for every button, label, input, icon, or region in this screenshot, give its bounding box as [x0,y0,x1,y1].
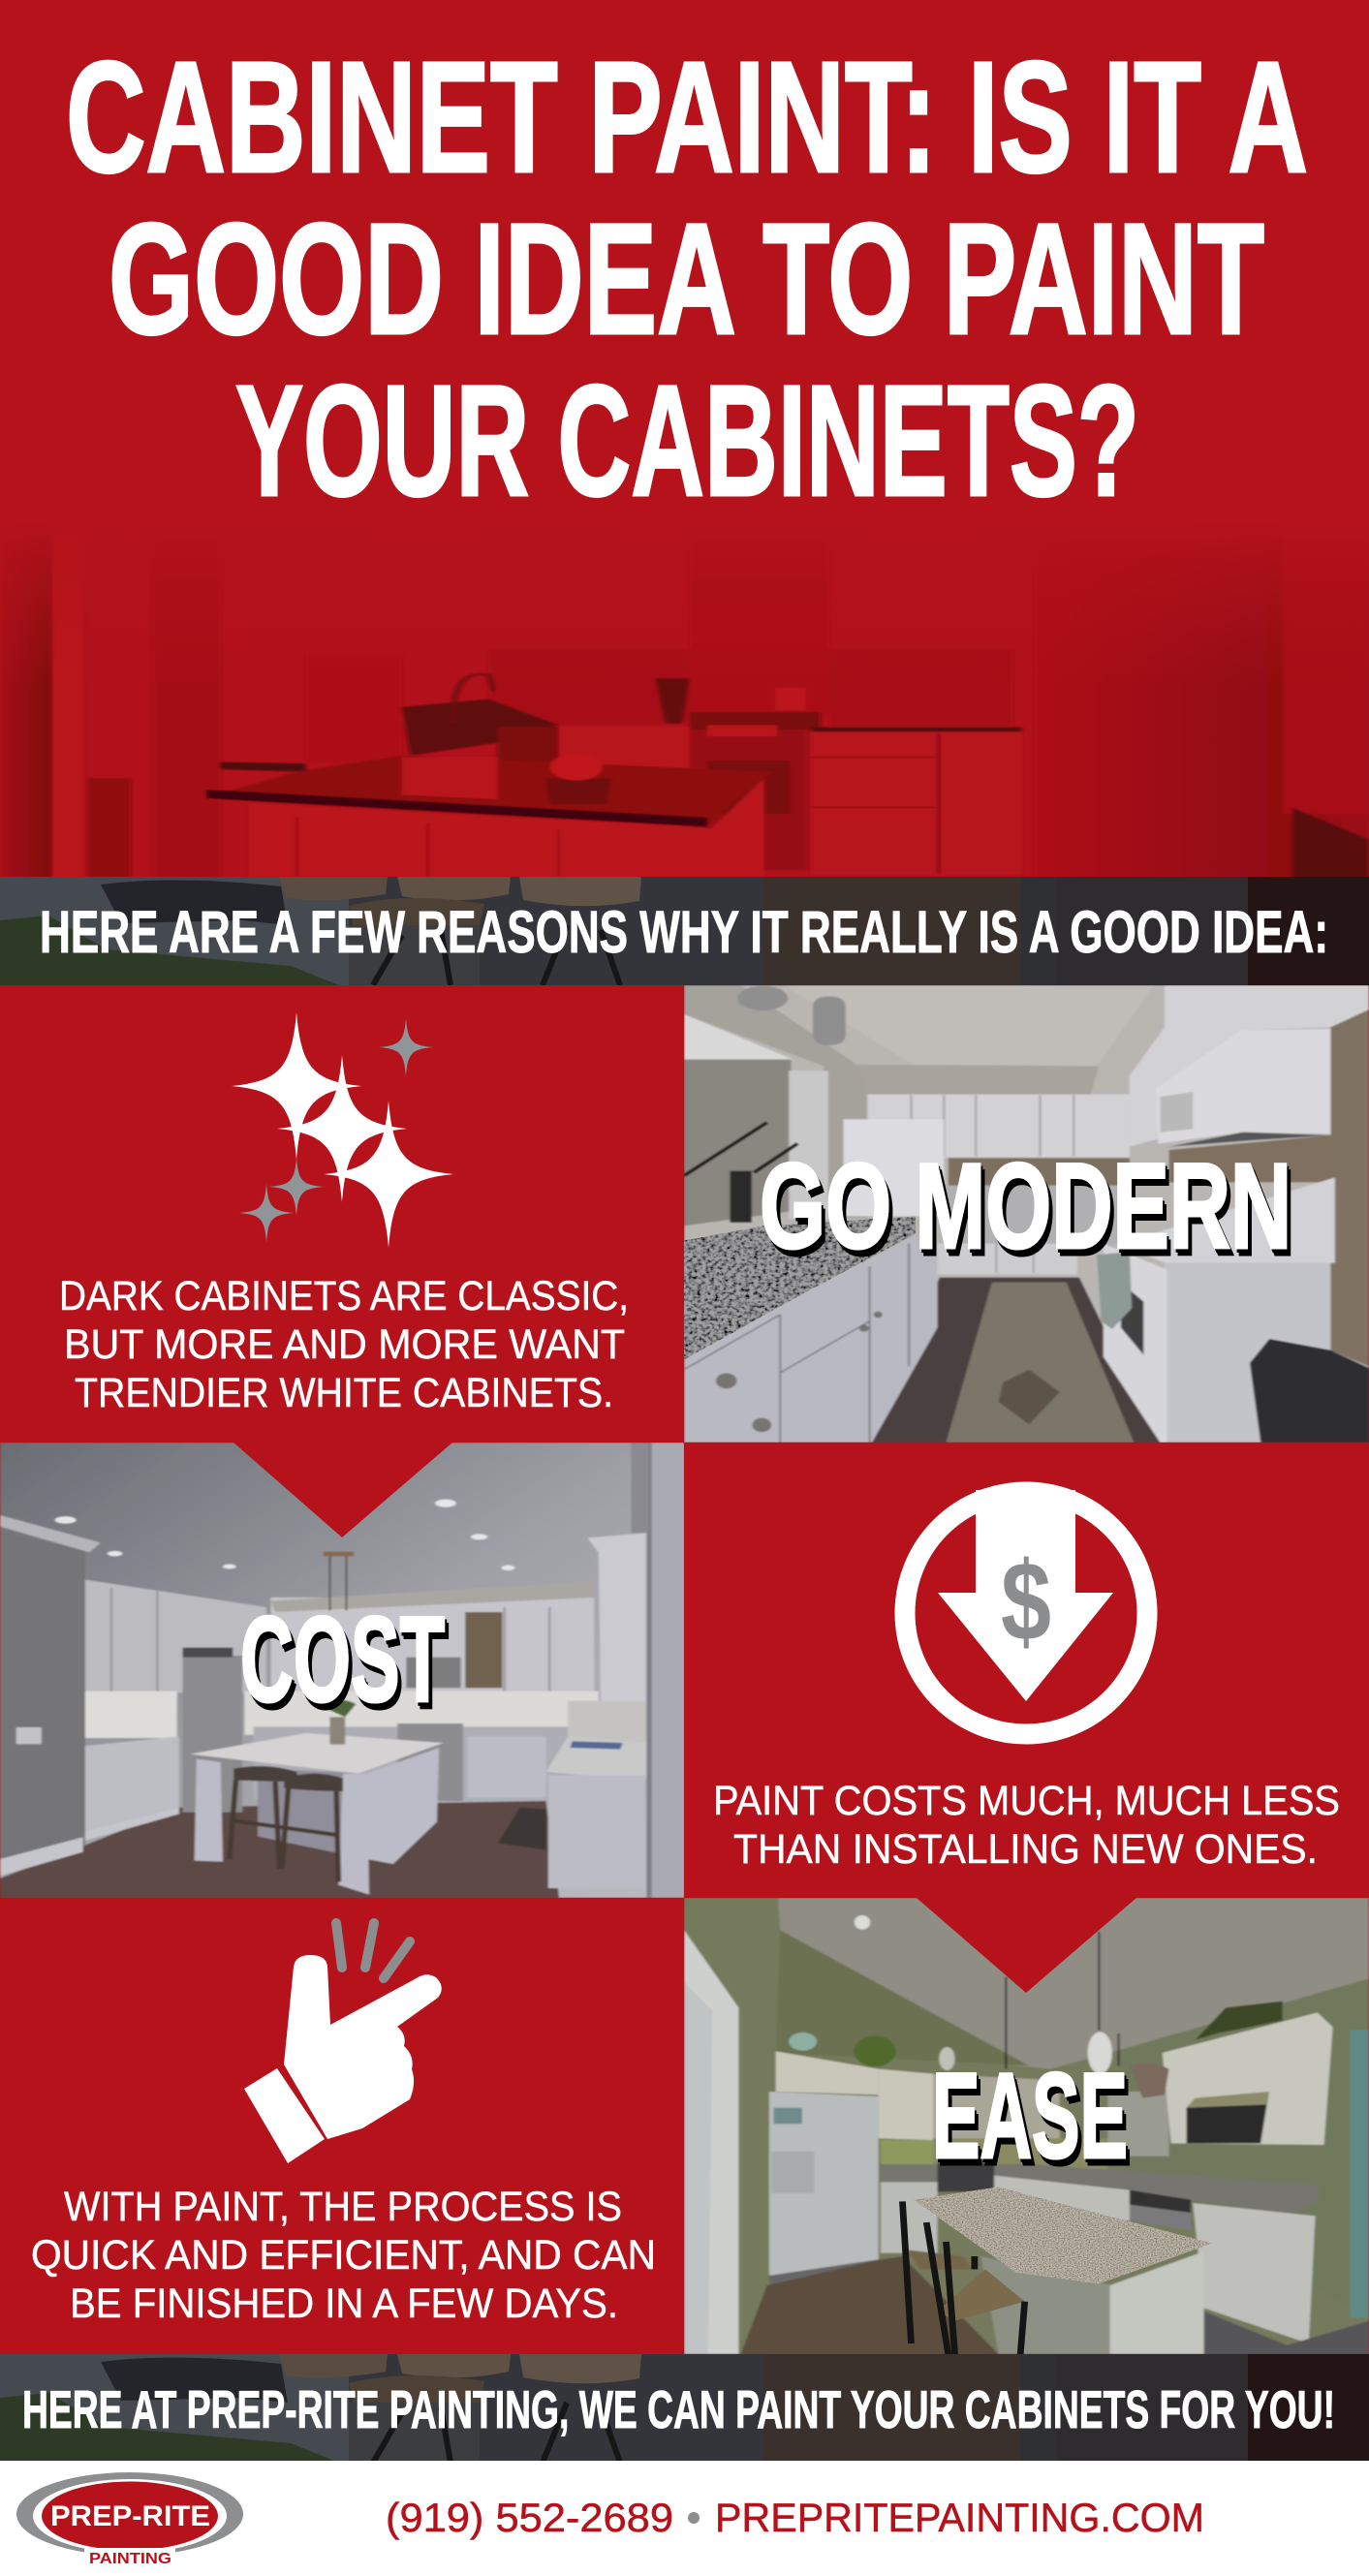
text: cost body [713,1778,1340,1873]
panel: cost text [684,1443,1369,1898]
logo: Prep-Rite Painting: PREP-RITE [50,2500,210,2532]
photo: go modern kitchen [684,985,1369,1443]
icon: dollar down arrow [905,1490,1147,1734]
text: go modern body: TRENDIER WHITE CABINETS. [75,1370,613,1416]
logo: Prep-Rite Painting: PAINTING [89,2551,171,2567]
photo: cost kitchen [0,1443,684,1898]
icon: dollar down arrow: $ [1001,1538,1051,1664]
banner: call to action [0,2354,1369,2463]
text: ease body: BE FINISHED IN A FEW DAYS. [70,2281,618,2327]
text: go modern body: DARK CABINETS ARE CLASSIC, [59,1273,629,1319]
icon: finger snap hand [244,1923,442,2163]
heading: cost: COST [240,1593,445,1727]
photo: ease kitchen [684,1898,1369,2354]
text: ease body: QUICK AND EFFICIENT, AND CAN [31,2232,656,2279]
banner: reasons heading [0,877,1369,985]
panel: ease text [0,1898,684,2354]
panel: go modern text [0,985,684,1443]
footer [0,2461,1369,2576]
arrow: red notch above cost photo [233,1443,452,1537]
text: go modern body: BUT MORE AND MORE WANT [64,1321,625,1368]
text: cost body: THAN INSTALLING NEW ONES. [733,1826,1318,1873]
arrow: red notch above ease photo [917,1898,1136,1993]
logo: Prep-Rite Painting [16,2472,243,2569]
text: ease body [31,2184,656,2327]
contact line: (919) 552-2689 [386,2495,673,2540]
text: go modern body [59,1273,629,1416]
heading: ease: EASE [932,2049,1128,2184]
contact line [386,2495,1204,2540]
title [66,28,1308,529]
icon: sparkles [232,1012,453,1248]
contact line: PREPRITEPAINTING.COM [715,2495,1204,2540]
text: ease body: WITH PAINT, THE PROCESS IS [64,2184,622,2230]
photo: red-tinted kitchen [0,543,1369,987]
